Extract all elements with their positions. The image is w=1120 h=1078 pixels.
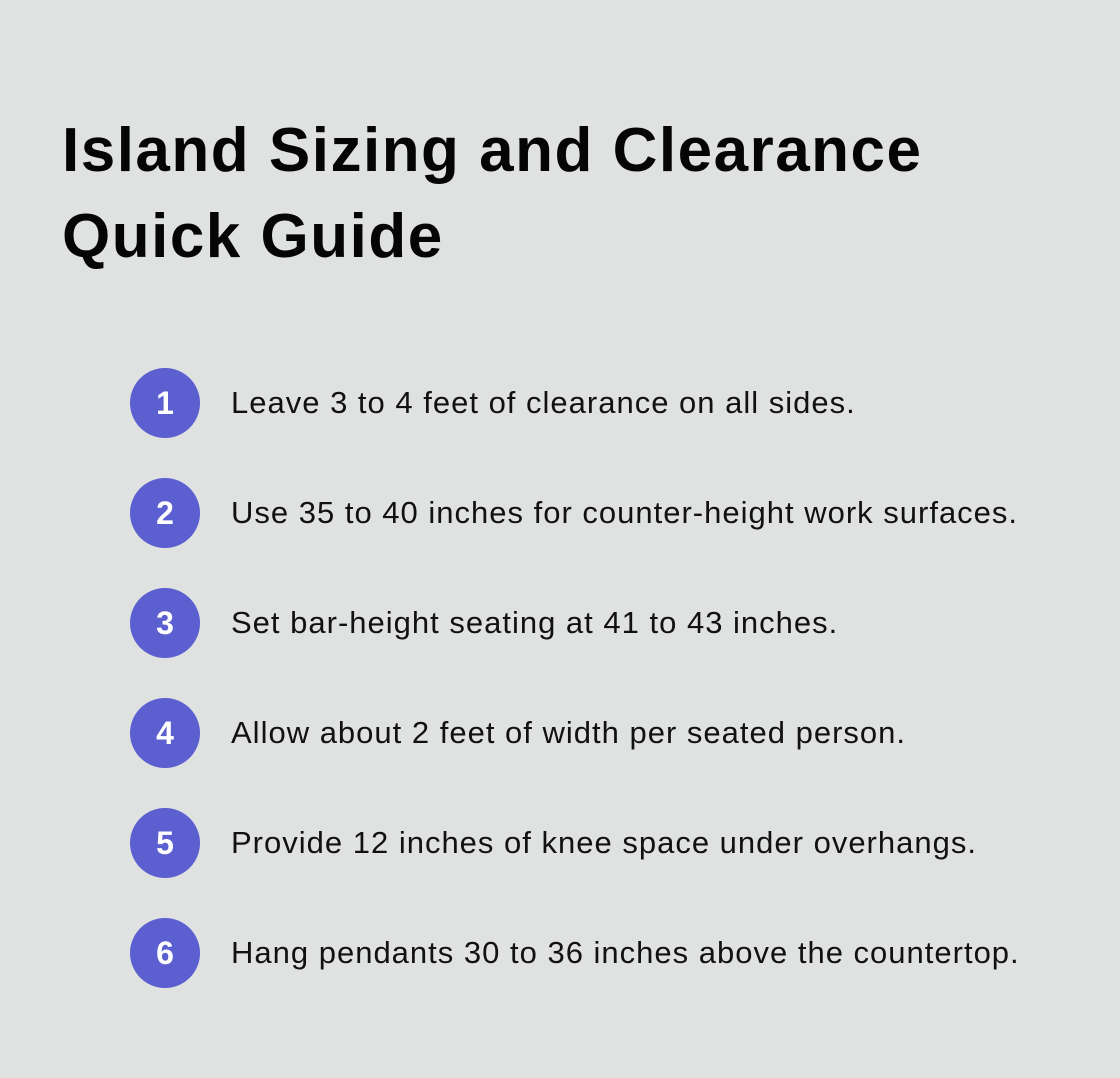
item 2 (130, 478, 1018, 548)
item 2: 2 (156, 495, 174, 531)
item 1: Leave 3 to 4 feet of clearance on all sides. (231, 385, 856, 420)
item 6: 6 (156, 935, 174, 971)
item 6 (130, 918, 1020, 988)
item 2: Use 35 to 40 inches for counter-height work surfaces. (231, 495, 1018, 530)
item 6: Hang pendants 30 to 36 inches above the countertop. (231, 935, 1020, 970)
item 1 (130, 368, 856, 438)
title: Island Sizing and Clearance (62, 116, 923, 185)
title (62, 116, 923, 271)
item 5: Provide 12 inches of knee space under overhangs. (231, 825, 977, 860)
item 4: 4 (156, 715, 174, 751)
item 3: 3 (156, 605, 174, 641)
item 5 (130, 808, 977, 878)
item 4 (130, 698, 906, 768)
title: Quick Guide (62, 202, 444, 271)
item 3: Set bar-height seating at 41 to 43 inches. (231, 605, 838, 640)
item 4: Allow about 2 feet of width per seated person. (231, 715, 906, 750)
item 1: 1 (156, 385, 174, 421)
item 3 (130, 588, 838, 658)
item 5: 5 (156, 825, 174, 861)
